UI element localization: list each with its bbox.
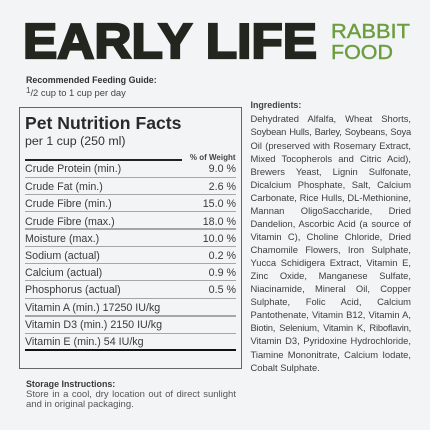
panel border (19, 107, 242, 369)
row: vitamin a: Vitamin A (min.) 17250 IU/kg (25, 302, 160, 314)
row: moisture: Moisture (max.) (25, 233, 99, 245)
row: phosphorus: Phosphorus (actual) (25, 284, 121, 296)
row: calcium: Calcium (actual) (25, 267, 102, 279)
text block: ingredients list: Mannan OligoSaccharide, Dried (250, 205, 411, 216)
row: sodium (25, 250, 236, 262)
row: crude protein: 9.0 % (209, 163, 236, 175)
text block: ingredients list: Dehydrated Alfalfa, Wheat Shorts, (250, 113, 411, 124)
row: phosphorus (25, 284, 236, 296)
text block: ingredients list: Zinc Oxide, Manganese Sulfate, (250, 270, 411, 281)
text block: ingredients list: Tiamine Mononitrate, Calcium Iodate, (250, 349, 411, 360)
header rule (25, 159, 182, 161)
text block: ingredients list: Dicalcium Phosphate, Salt, Calcium (250, 179, 411, 190)
row: crude fibre min: Crude Fibre (min.) (25, 198, 112, 210)
text block: ingredients list: Vitamin D3, Pyridoxine Hydrochloride, (250, 335, 411, 346)
column heading: percent of weight: % of Weight (190, 153, 236, 162)
row: calcium: 0.9 % (209, 267, 236, 279)
subheading: food: FOOD (331, 41, 393, 64)
text block: ingredients list: Yucca Schidigera Extract, Vitamin E, (250, 257, 411, 268)
text block: storage instructions: Storage Instructions: (26, 378, 115, 388)
row: moisture: 10.0 % (203, 233, 236, 245)
row: sodium: 0.2 % (209, 250, 236, 262)
bottom rule (25, 349, 236, 351)
text block: feeding guide (26, 75, 157, 98)
text block: ingredients list: Niacinamide, Mineral Oil, Copper (250, 283, 411, 294)
row: moisture (25, 233, 236, 245)
text block: ingredients list (250, 113, 412, 373)
text block: ingredients list: Cobalt Sulphate. (250, 362, 320, 373)
text block: feeding guide: Recommended Feeding Guide: (26, 75, 157, 85)
text block: ingredients list: Chamomile Flowers, Iron Sulphate, (250, 244, 411, 255)
text block: ingredients list: Dandelion, Ascorbic Acid (a source of (250, 218, 411, 229)
row: crude fibre min: 15.0 % (203, 198, 236, 210)
row: vitamin d3: Vitamin D3 (min.) 2150 IU/kg (25, 319, 162, 331)
text block: storage instructions: and in original packaging. (26, 399, 134, 410)
row: crude fibre max: Crude Fibre (max.) (25, 216, 115, 228)
row: crude protein (25, 163, 236, 175)
row: crude protein: Crude Protein (min.) (25, 163, 121, 175)
row: calcium (25, 267, 236, 279)
title: early life rabbit food (23, 14, 411, 69)
text block: ingredients list: Soybean Hulls, Barley, Soybeans, Soya (250, 126, 411, 137)
text block: ingredients list: Pantothenate, Vitamin B12, Vitamin A, (250, 309, 411, 320)
row: phosphorus: 0.5 % (209, 284, 236, 296)
text block: ingredients list: Brewers Yeast, Lignin Sulfonate, (250, 166, 411, 177)
row: crude fat (25, 181, 236, 193)
text block: ingredients list: Carbonate, Rice Hulls, DL-Methionine, (250, 192, 411, 203)
row: sodium: Sodium (actual) (25, 250, 100, 262)
text block: ingredients list: Mixed Tocopherols and Citric Acid), (250, 153, 411, 164)
text block: storage instructions: Store in a cool, dry location out of direct sunlight (26, 388, 236, 400)
text block: feeding guide: 1/2 cup to 1 cup per day (26, 86, 126, 98)
text block: ingredients list: Vitamin C), Choline Chloride, Dried (250, 231, 411, 242)
text block: ingredients list: Sulphate, Folic Acid, Calcium (250, 296, 411, 307)
row: crude fibre min (25, 198, 236, 210)
row: crude fat: 2.6 % (209, 181, 236, 193)
heading: pet nutrition facts: Pet Nutrition Facts (25, 113, 181, 133)
text block: ingredients list: Biotin, Selenium, Vitamin K, Riboflavin, (250, 322, 411, 333)
text block: ingredients list: Oil (preserved with Rosemary Extract, (250, 140, 411, 151)
heading: ingredients: Ingredients: (250, 100, 301, 110)
subheading: rabbit: RABBIT (331, 20, 411, 43)
text block: storage instructions (26, 378, 236, 410)
row: crude fibre max: 18.0 % (203, 216, 236, 228)
row: vitamin e: Vitamin E (min.) 54 IU/kg (25, 336, 144, 348)
heading: early life: EARLY LIFE (23, 14, 317, 69)
row: crude fat: Crude Fat (min.) (25, 181, 103, 193)
row: crude fibre max (25, 216, 236, 228)
serving size: per 1 cup (250 ml) (25, 134, 126, 148)
